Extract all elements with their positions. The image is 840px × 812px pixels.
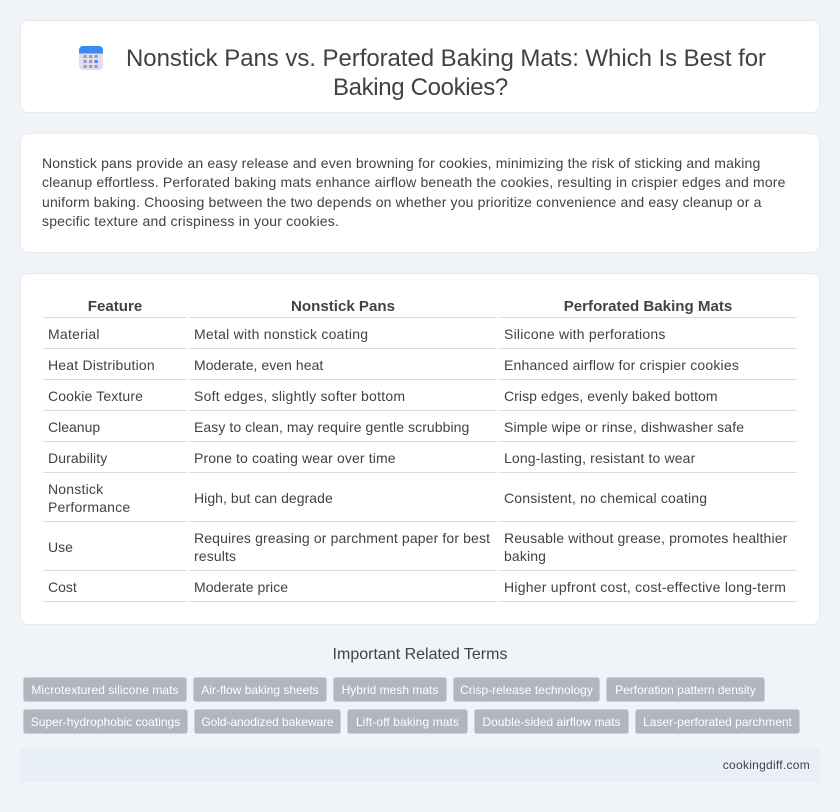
comparison table: Moderate, even heat [194,356,323,372]
related terms tags: Double-sided airflow mats [482,715,621,729]
summary text: cleanup effortless. Perforated baking mats enhance airflow beneath the cookies, resulting in crispier edges and more [42,174,786,190]
related terms tags: Hybrid mesh mats [342,683,438,697]
comparison table: Moderate price [194,578,288,594]
comparison table: Higher upfront cost, cost-effective long-term [504,578,786,594]
icon: calendar [79,46,103,70]
comparison table: Requires greasing or parchment paper for best results [194,530,490,564]
related terms tags: Air-flow baking sheets [201,683,319,697]
title: Baking Cookies? [333,74,508,101]
footer bar [20,748,820,782]
comparison table: Simple wipe or rinse, dishwasher safe [504,418,744,434]
comparison table: Long-lasting, resistant to wear [504,450,695,466]
comparison table: Use [48,538,73,554]
comparison table: Metal with nonstick coating [194,326,368,342]
comparison table: Cost [48,578,77,594]
comparison table: Crisp edges, evenly baked bottom [504,388,718,404]
related terms tags: Laser-perforated parchment [643,715,792,729]
related terms tags [23,677,800,734]
comparison table: Cleanup [48,418,100,434]
related terms heading: Important Related Terms [333,646,507,663]
comparison table: Material [48,326,100,342]
comparison table: Prone to coating wear over time [194,450,396,466]
related terms tags: Crisp-release technology [460,683,593,697]
comparison table: Performance [48,498,130,514]
comparison table: Soft edges, slightly softer bottom [194,388,405,404]
related terms tags: Super-hydrophobic coatings [31,715,180,729]
panel: title card [20,20,820,113]
related terms tags: Gold-anodized bakeware [201,715,334,729]
comparison table: Consistent, no chemical coating [504,490,707,506]
comparison table: Nonstick [48,480,103,496]
comparison table: Cookie Texture [48,388,143,404]
summary text: specific texture and crispiness in your cookies. [42,213,339,229]
panel: comparison table [20,273,820,625]
title: Nonstick Pans vs. Perforated Baking Mats: Which Is Best for [126,45,766,72]
summary text: Nonstick pans provide an easy release and even browning for cookies, minimizing the risk of sticking and making [42,155,760,171]
related terms tags: Lift-off baking mats [356,715,459,729]
related terms tags: Perforation pattern density [615,683,756,697]
comparison table: Feature [88,298,142,315]
comparison table: Easy to clean, may require gentle scrubbing [194,418,469,434]
title [126,45,766,101]
summary text: uniform baking. Choosing between the two depends on whether you prioritize convenience and easy cleanup or a [42,194,762,210]
comparison table [43,298,797,602]
comparison table: Perforated Baking Mats [564,298,732,315]
footer source text: cookingdiff.com [723,758,810,772]
summary text [42,155,786,229]
comparison table: Heat Distribution [48,356,155,372]
comparison table: Durability [48,450,107,466]
comparison table: Enhanced airflow for crispier cookies [504,356,739,372]
comparison table: High, but can degrade [194,490,333,506]
comparison table: Silicone with perforations [504,326,666,342]
related terms tags: Microtextured silicone mats [31,683,179,697]
comparison table: Reusable without grease, promotes healthier baking [504,530,787,564]
panel: summary card [20,133,820,253]
comparison table: Nonstick Pans [291,298,395,315]
